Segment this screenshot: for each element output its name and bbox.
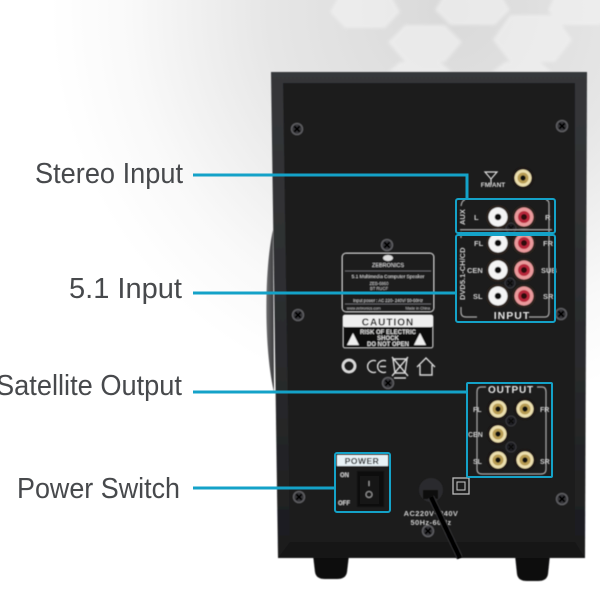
- product label: ZEB-6860: [370, 281, 389, 286]
- jack labels: L: [474, 213, 479, 222]
- RCA jacks: [486, 205, 536, 308]
- output jack labels: SR: [540, 459, 550, 466]
- power cord: [419, 478, 460, 558]
- warning triangles: [347, 333, 426, 345]
- antenna jack: [512, 167, 534, 189]
- hexagon background pattern: [330, 0, 600, 72]
- caution label: [343, 315, 433, 348]
- antenna: FM/ANT: [481, 182, 505, 189]
- output outline: [477, 387, 546, 474]
- jack labels: FR: [543, 239, 554, 248]
- output section: [468, 385, 550, 474]
- jack labels: SL: [473, 292, 483, 301]
- jack labels: SUB: [541, 266, 557, 275]
- input inner outline: [461, 200, 549, 317]
- vertical labels: AUX: [458, 209, 467, 225]
- output heading: OUTPUT: [488, 385, 534, 396]
- power heading: [337, 455, 388, 466]
- output jack labels: SL: [473, 459, 483, 466]
- double insulation icon: [453, 478, 469, 494]
- antenna: [481, 167, 534, 189]
- speaker feet: [313, 555, 550, 581]
- caution label: SHOCK: [377, 336, 399, 342]
- callout: stereo input: Stereo Input: [35, 158, 183, 190]
- output jack labels: [468, 407, 550, 466]
- product label: [342, 253, 434, 312]
- callout: power switch: Power Switch: [17, 473, 180, 505]
- rocker: [357, 471, 384, 507]
- speaker side curve: [266, 230, 274, 392]
- back panel: [283, 83, 575, 542]
- output jacks: [487, 398, 536, 471]
- product label: 5.1 Multimedia Computer Speaker: [352, 274, 425, 280]
- product label: Made in China: [406, 306, 431, 310]
- product label: ZEBRONICS: [372, 263, 404, 269]
- label logo: [383, 255, 393, 261]
- antenna icon: [485, 172, 497, 185]
- jack labels: [467, 213, 557, 301]
- input heading: INPUT: [494, 310, 530, 322]
- output jack labels: FR: [540, 407, 549, 414]
- output jack labels: CEN: [468, 432, 483, 439]
- output jack labels: FL: [473, 407, 482, 414]
- product label: BT RUCF: [370, 286, 388, 291]
- power switch: ON: [340, 473, 349, 479]
- voltage text: AC220V~240V: [404, 509, 458, 518]
- power switch: OFF: [338, 501, 350, 507]
- callout: stereo input: [35, 158, 467, 199]
- input section: [458, 200, 557, 322]
- highlight boxes: [335, 199, 555, 512]
- product label: Input power : AC 220- 240V/ 50-60Hz: [353, 298, 423, 303]
- caution label: DO NOT OPEN: [367, 342, 409, 348]
- product label: www.zebronics.com: [347, 306, 381, 310]
- caution label: RISK OF ELECTRIC: [360, 330, 417, 336]
- callout: satellite output: Satellite Output: [0, 370, 182, 402]
- callout: 5.1 input: 5.1 Input: [69, 273, 182, 305]
- caution label: CAUTION: [362, 318, 414, 328]
- power switch: [335, 453, 390, 512]
- jack labels: FL: [474, 239, 484, 248]
- speaker frame: [271, 72, 587, 558]
- voltage text: [404, 509, 458, 527]
- speaker: [266, 72, 587, 581]
- screws: [292, 120, 568, 536]
- jack labels: SR: [543, 292, 554, 301]
- jack labels: R: [545, 213, 551, 222]
- power switch: POWER: [345, 456, 379, 466]
- jack labels: CEN: [467, 266, 483, 275]
- compliance icons: [343, 357, 435, 378]
- input section: DVD5.1-CH/CD: [458, 247, 467, 300]
- voltage text: 50Hz-60Hz: [410, 518, 452, 527]
